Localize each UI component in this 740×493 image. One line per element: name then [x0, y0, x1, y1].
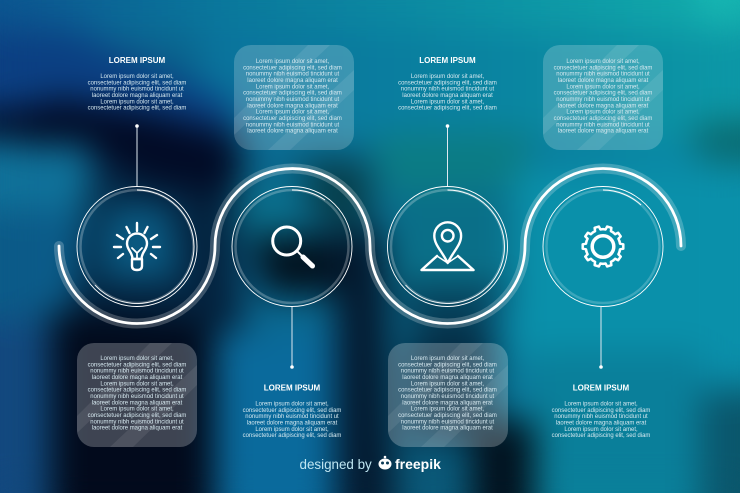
text block 3b: consectetuer adipiscing elit, sed diam [398, 388, 497, 394]
glass panel 1 [77, 343, 197, 447]
text block 1b: Lorem ipsum dolor sit amet, [100, 356, 174, 362]
text block 2: laoreet dolore magna aliquam erat [247, 103, 338, 109]
text block 1: consectetuer adipiscing elit, sed diam [88, 106, 186, 112]
text block 2: nonummy nibh euismod tincidunt ut [246, 122, 340, 128]
icon: map pin [422, 222, 474, 270]
text block 4: laoreet dolore magna aliquam erat [558, 129, 649, 135]
text block 4: consectetuer adipiscing elit, sed diam [554, 65, 652, 71]
text block 2: nonummy nibh euismod tincidunt ut [246, 97, 340, 103]
text block 2b: consectetuer adipiscing elit, sed diam [243, 433, 341, 439]
text block 2b [243, 402, 341, 439]
text block 2b: nonummy nibh euismod tincidunt ut [245, 414, 339, 420]
text block 3 [398, 74, 497, 112]
text block 2: nonummy nibh euismod tincidunt ut [246, 72, 340, 78]
text block 3b: Lorem ipsum dolor sit amet, [411, 356, 484, 362]
heading 2: LOREM IPSUM [264, 384, 321, 392]
text block 4b: nonummy nibh euismod tincidunt ut [554, 414, 648, 420]
text block 3: Lorem ipsum dolor sit amet, [411, 74, 484, 80]
text block 4b [552, 402, 650, 439]
text block 1: nonummy nibh euismod tincidunt ut [90, 87, 184, 93]
text block 4: consectetuer adipiscing elit, sed diam [554, 91, 652, 97]
text block 1b [88, 356, 186, 432]
text block 4 [554, 59, 652, 135]
text block 2: laoreet dolore magna aliquam erat [247, 129, 338, 135]
text block 3: consectetuer adipiscing elit, sed diam [398, 80, 497, 86]
circle 2 [232, 186, 352, 306]
text block 1: Lorem ipsum dolor sit amet, [100, 99, 174, 105]
icon: magnifier [273, 227, 312, 266]
text block 1b: laoreet dolore magna aliquam erat [92, 426, 183, 432]
text block 2b: Lorem ipsum dolor sit amet, [255, 427, 329, 433]
text block 1b: nonummy nibh euismod tincidunt ut [90, 394, 184, 400]
text block 2: laoreet dolore magna aliquam erat [247, 78, 338, 84]
text block 1b: nonummy nibh euismod tincidunt ut [90, 419, 184, 425]
heading 3: LOREM IPSUM [419, 56, 476, 65]
text block 1b: nonummy nibh euismod tincidunt ut [90, 369, 184, 375]
circle 3 [388, 186, 508, 306]
text block 1b: Lorem ipsum dolor sit amet, [100, 381, 174, 387]
text block 2: Lorem ipsum dolor sit amet, [256, 84, 329, 90]
icon: freepik mascot [378, 456, 392, 470]
text block 2: Lorem ipsum dolor sit amet, [256, 59, 329, 65]
text block 1b: laoreet dolore magna aliquam erat [92, 400, 183, 406]
text block 3b: nonummy nibh euismod tincidunt ut [401, 394, 495, 400]
heading 1: LOREM IPSUM [109, 56, 166, 65]
text block 2b: laoreet dolore magna aliquam erat [247, 420, 338, 426]
step 1: idea [77, 56, 197, 306]
text block 3: consectetuer adipiscing elit, sed diam [398, 106, 497, 112]
glass panel 2 [234, 45, 354, 150]
text block 1: consectetuer adipiscing elit, sed diam [88, 80, 186, 86]
curved timeline ribbon [59, 168, 681, 324]
text block 3: laoreet dolore magna aliquam erat [402, 93, 493, 99]
text block 3b: laoreet dolore magna aliquam erat [402, 426, 493, 432]
text block 2: consectetuer adipiscing elit, sed diam [243, 116, 342, 122]
text block 1: Lorem ipsum dolor sit amet, [100, 74, 174, 80]
text block 3b: nonummy nibh euismod tincidunt ut [401, 369, 495, 375]
text block 4: laoreet dolore magna aliquam erat [558, 78, 649, 84]
heading 4: LOREM IPSUM [573, 384, 630, 392]
text block 4: nonummy nibh euismod tincidunt ut [556, 122, 650, 128]
text block 4: Lorem ipsum dolor sit amet, [566, 84, 640, 90]
text block 1b: Lorem ipsum dolor sit amet, [100, 407, 174, 413]
text block 3b: Lorem ipsum dolor sit amet, [411, 381, 484, 387]
text block 2b: consectetuer adipiscing elit, sed diam [243, 408, 341, 414]
text block 3: Lorem ipsum dolor sit amet, [411, 99, 484, 105]
text block 4: consectetuer adipiscing elit, sed diam [554, 116, 652, 122]
text block 3b [398, 356, 497, 432]
text block 1 [88, 74, 186, 112]
text block 3b: laoreet dolore magna aliquam erat [402, 400, 493, 406]
step 3: location [388, 56, 508, 306]
text block 1b: consectetuer adipiscing elit, sed diam [88, 388, 186, 394]
text block 4b: Lorem ipsum dolor sit amet, [564, 402, 638, 408]
text block 4: Lorem ipsum dolor sit amet, [566, 59, 640, 65]
text block 3b: nonummy nibh euismod tincidunt ut [401, 419, 495, 425]
step 2: search [232, 45, 354, 439]
text block 4: Lorem ipsum dolor sit amet, [566, 110, 640, 116]
text block 4: laoreet dolore magna aliquam erat [558, 103, 649, 109]
text block 2: Lorem ipsum dolor sit amet, [256, 110, 329, 116]
text block 4b: laoreet dolore magna aliquam erat [556, 420, 647, 426]
text block 4: nonummy nibh euismod tincidunt ut [556, 97, 650, 103]
glass panel 4 [543, 45, 663, 150]
text block 3b: consectetuer adipiscing elit, sed diam [398, 362, 497, 368]
text block 4b: consectetuer adipiscing elit, sed diam [552, 408, 650, 414]
text block 2: consectetuer adipiscing elit, sed diam [243, 91, 342, 97]
connector 4 [599, 307, 603, 369]
text block 1b: consectetuer adipiscing elit, sed diam [88, 413, 186, 419]
text block 1b: consectetuer adipiscing elit, sed diam [88, 362, 186, 368]
text block 1b: laoreet dolore magna aliquam erat [92, 375, 183, 381]
text block 2b: Lorem ipsum dolor sit amet, [255, 402, 329, 408]
glass panel 3 [388, 343, 508, 447]
icon: light bulb [114, 223, 160, 270]
connector 1 [135, 124, 139, 186]
text block 3b: consectetuer adipiscing elit, sed diam [398, 413, 497, 419]
connector 3 [446, 124, 449, 186]
text block 4b: Lorem ipsum dolor sit amet, [564, 427, 638, 433]
text block 3: nonummy nibh euismod tincidunt ut [401, 87, 495, 93]
footer credit: designed by [300, 457, 372, 472]
step 4: settings [543, 45, 663, 439]
footer credit: freepik [395, 456, 441, 472]
footer credit [300, 456, 441, 472]
connector 2 [290, 307, 294, 369]
text block 4: nonummy nibh euismod tincidunt ut [556, 72, 650, 78]
text block 2 [243, 59, 342, 135]
text block 3b: laoreet dolore magna aliquam erat [402, 375, 493, 381]
text block 1: laoreet dolore magna aliquam erat [92, 93, 183, 99]
text block 3b: Lorem ipsum dolor sit amet, [411, 407, 484, 413]
icon: gear [583, 226, 623, 267]
text block 2: consectetuer adipiscing elit, sed diam [243, 65, 342, 71]
circle 4 [543, 186, 663, 306]
circle 1 [77, 186, 197, 306]
text block 4b: consectetuer adipiscing elit, sed diam [552, 433, 650, 439]
